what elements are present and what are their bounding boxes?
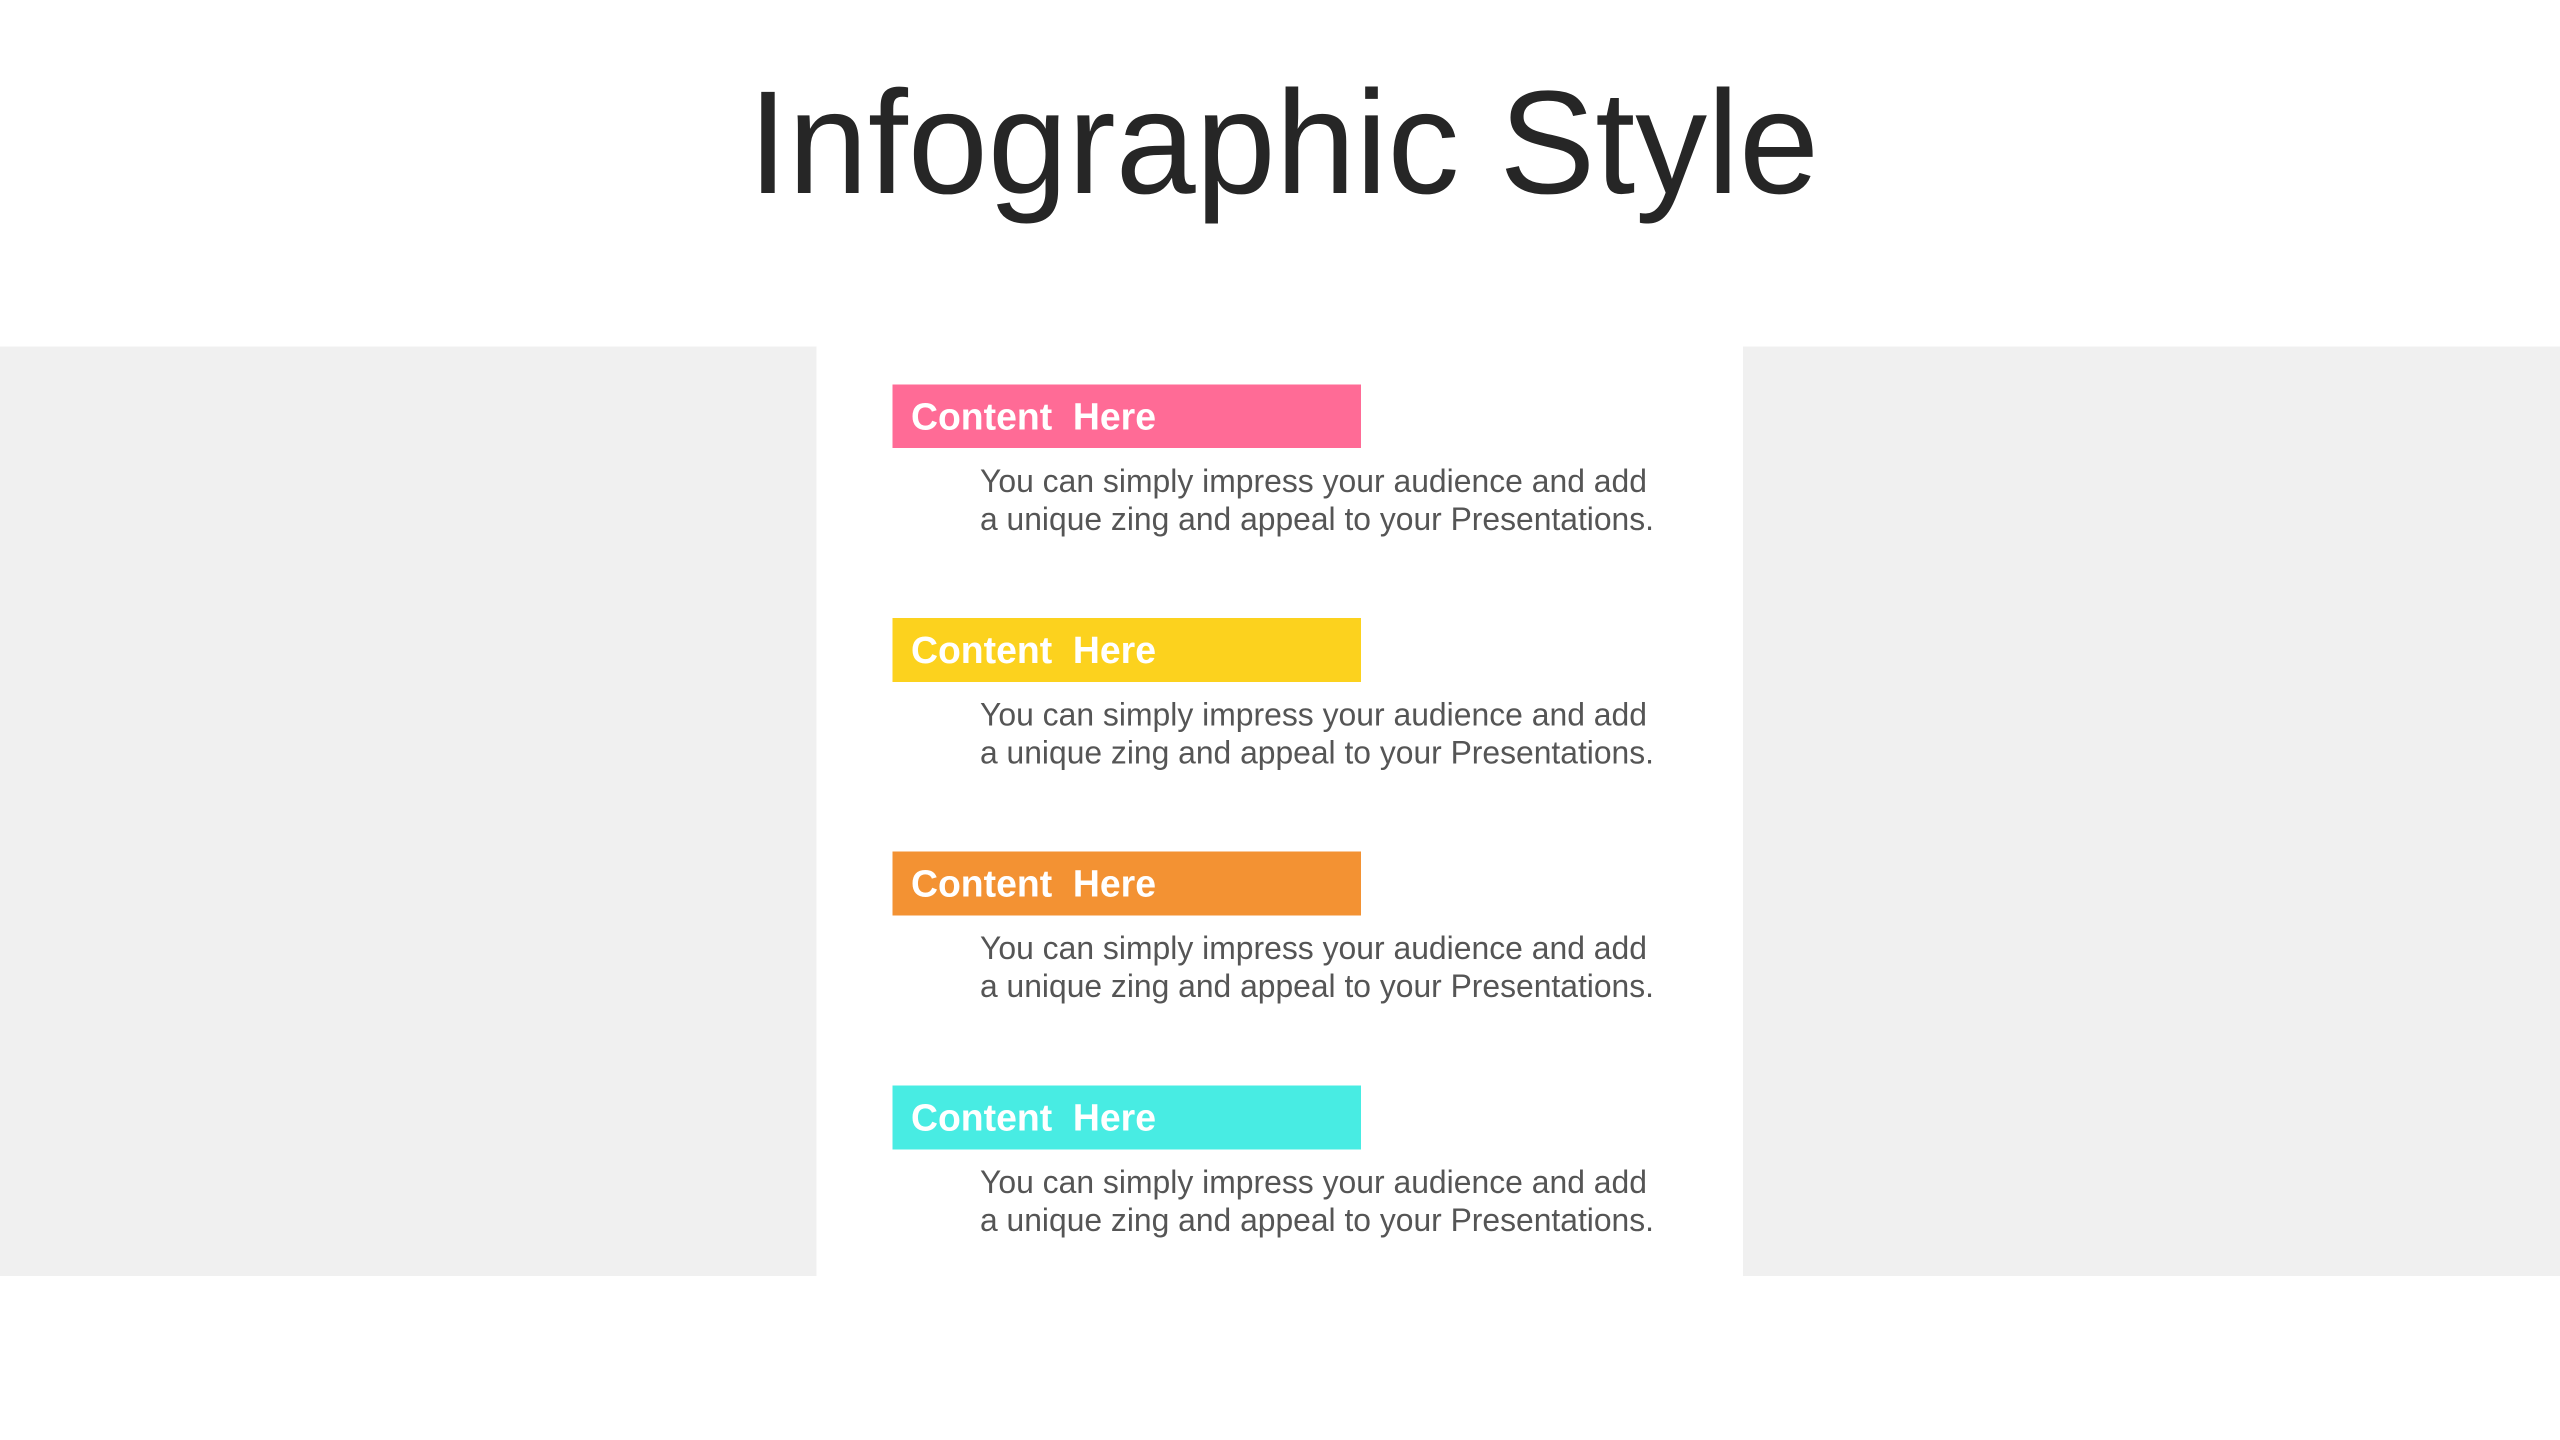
body text: orange: You can simply impress your audience and add bbox=[980, 930, 1647, 966]
body text: yellow: You can simply impress your audience and add bbox=[980, 696, 1647, 732]
heading bar: yellow bbox=[892, 618, 1361, 682]
title: Infographic Style bbox=[748, 61, 1819, 225]
heading text: cyan: Content Here bbox=[911, 1098, 1156, 1140]
panel: left gray band bbox=[0, 346, 816, 1276]
heading bar: pink bbox=[892, 384, 1361, 448]
heading bar: orange bbox=[892, 852, 1361, 916]
heading text: pink: Content Here bbox=[911, 396, 1156, 438]
body text: cyan: a unique zing and appeal to your Presentations. bbox=[980, 1202, 1654, 1238]
body text: orange bbox=[980, 930, 1654, 1004]
body text: pink bbox=[980, 463, 1654, 537]
body text: yellow: a unique zing and appeal to your Presentations. bbox=[980, 734, 1654, 770]
body text: cyan bbox=[980, 1164, 1654, 1238]
body text: orange: a unique zing and appeal to your Presentations. bbox=[980, 968, 1654, 1004]
item 1: pink bbox=[892, 384, 1654, 537]
item 4: cyan bbox=[892, 1086, 1654, 1238]
item 3: orange bbox=[892, 852, 1654, 1004]
body text: cyan: You can simply impress your audience and add bbox=[980, 1164, 1647, 1200]
heading bar: cyan bbox=[892, 1086, 1361, 1150]
body text: pink: a unique zing and appeal to your Presentations. bbox=[980, 501, 1654, 537]
body text: pink: You can simply impress your audience and add bbox=[980, 463, 1647, 499]
heading text: yellow: Content Here bbox=[911, 630, 1156, 672]
panel: right gray band bbox=[1743, 346, 2560, 1276]
item 2: yellow bbox=[892, 618, 1654, 770]
heading text: orange: Content Here bbox=[911, 864, 1156, 906]
body text: yellow bbox=[980, 696, 1654, 770]
